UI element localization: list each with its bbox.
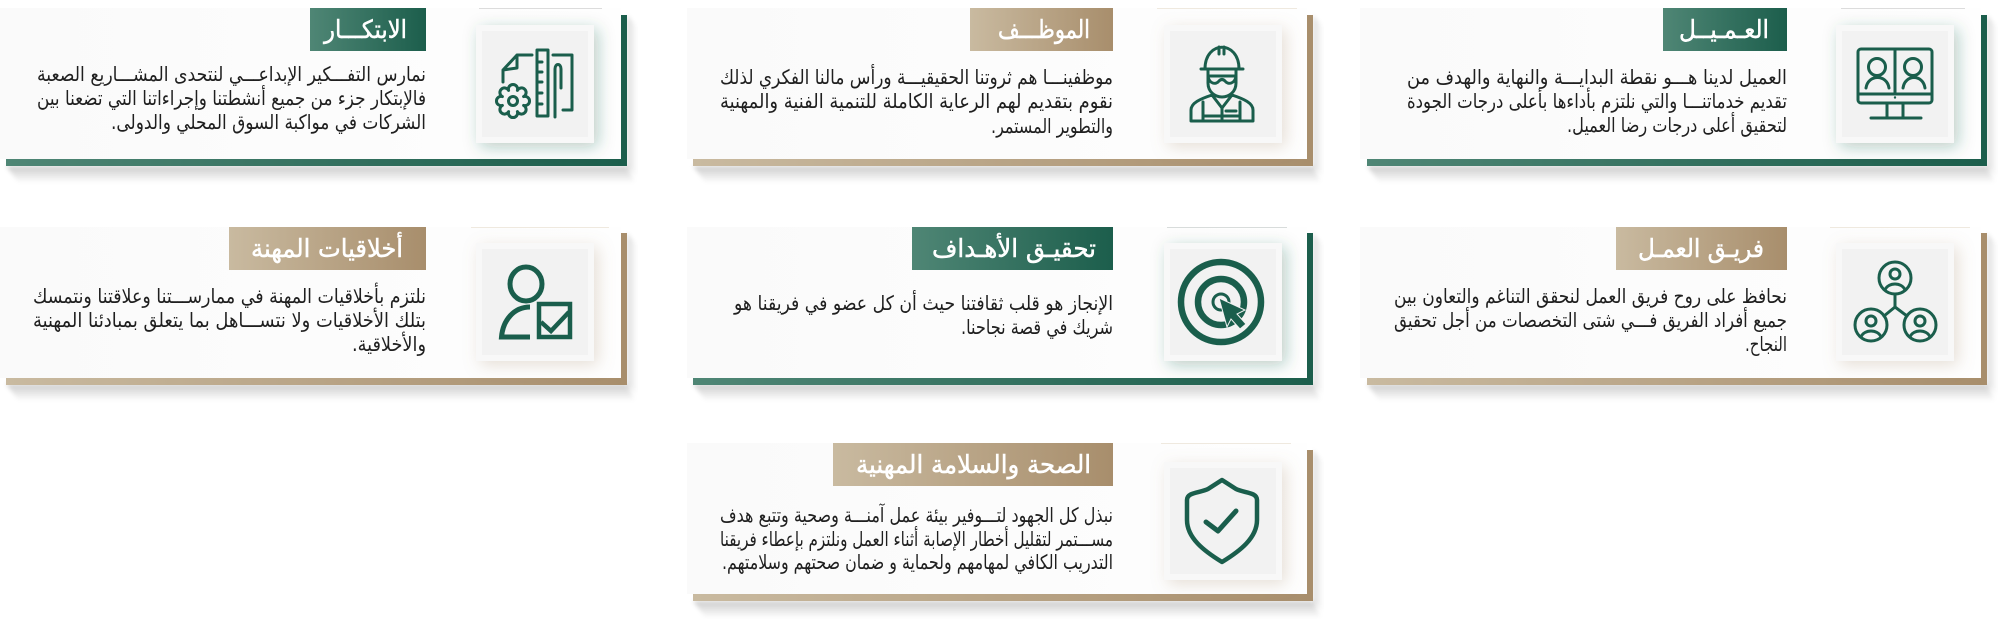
icon: team network	[1836, 243, 1954, 361]
text block: الموظف: والتطوير المستمر.	[991, 114, 1113, 138]
heading tab: العميل	[1663, 8, 1787, 51]
text block: الموظف: موظفينـــا هم ثروتنا الحقيقيـــة ورأس مالنا الفكري لذلك	[720, 64, 1113, 90]
heading tab: فريق العمل: فريـق العمـل	[1638, 234, 1764, 263]
text block: الموظف: نقوم بتقديم لهم الرعاية الكاملة للتنمية الفنية والمهنية	[720, 89, 1113, 113]
text block: العميل	[1407, 65, 1787, 137]
text block: تحقيق الأهداف	[733, 290, 1113, 340]
heading tab: الصحة والسلامة المهنية: الصحة والسلامة المهنية	[856, 450, 1091, 480]
text block: الابتكار: فالإبتكار جزء من جميع أنشطتنا وإجراءاتنا التي تضعنا بين	[37, 85, 426, 111]
heading tab: أخلاقيات المهنة: أخلاقيات المهنة	[251, 231, 403, 264]
text block: أخلاقيات المهنة: بتلك الأخلاقيات ولا نتســـاهل بما يتعلق بمبادئنا المهنية	[33, 308, 426, 332]
text block: الابتكار: الشركات في مواكبة السوق المحلي والدولى.	[111, 110, 426, 135]
icon: target with cursor	[1164, 243, 1282, 361]
icon: shield with check	[1164, 462, 1282, 580]
text block: الصحة والسلامة المهنية: التدريب الكافي لمهامهم ولحماية و ضمان صحتهم وسلامتهم.	[722, 550, 1113, 575]
text block: تحقيق الأهداف: الإنجاز هو قلب ثقافتنا حيث أن كل عضو في فريقنا هو	[733, 290, 1113, 316]
icon: video call monitor	[1836, 25, 1954, 143]
heading tab: الصحة والسلامة المهنية	[833, 443, 1113, 486]
panel: العميل	[1360, 8, 1997, 183]
heading tab: أخلاقيات المهنة	[229, 227, 426, 270]
heading tab: الموظف	[970, 8, 1113, 51]
panel: الموظف	[687, 8, 1323, 183]
panel: فريق العمل	[1360, 227, 1997, 401]
heading tab: تحقيق الأهداف: تحقيـق الأهـداف	[932, 232, 1096, 263]
heading tab: فريق العمل	[1616, 227, 1787, 270]
text block: الصحة والسلامة المهنية: مســـتمر لتقليل أخطار الإصابة أثناء العمل ونلتزم بإعطاء فريقنا	[720, 526, 1113, 552]
panel: أخلاقيات المهنة	[0, 227, 637, 401]
heading tab: الموظف: الموظـــف	[998, 15, 1090, 44]
text block: العميل: لتحقيق أعلى درجات رضا العميل.	[1567, 112, 1787, 137]
text block: العميل: تقديم خدماتنـــا والتي نلتزم بأداءها بأعلى درجات الجودة	[1407, 87, 1787, 114]
text block: فريق العمل: جميع أفراد الفريق فـــي شتى التخصصات من أجل تحقيق	[1394, 307, 1787, 333]
icon: worker with helmet	[1164, 25, 1282, 143]
text block: فريق العمل: نحافظ على روح فريق العمل لنحقق التناغم والتعاون بين	[1394, 284, 1787, 308]
icon: design tools and gear	[476, 25, 594, 143]
icon: person with check box	[476, 243, 594, 361]
text block: الابتكار	[37, 62, 426, 135]
text block: الابتكار: نمارس التفـــكير الإبداعـــي لنتحدى المشـــاريع الصعبة	[37, 62, 426, 87]
heading tab: تحقيق الأهداف	[912, 227, 1113, 270]
text block: الصحة والسلامة المهنية: نبذل كل الجهود لتـــوفير بيئة عمل آمنـــة وصحية وتتبع هدف	[720, 502, 1113, 527]
text block: الموظف	[720, 64, 1113, 138]
text block: أخلاقيات المهنة	[33, 282, 426, 356]
heading tab: الابتكار	[310, 8, 426, 51]
text block: الصحة والسلامة المهنية	[720, 502, 1113, 575]
text block: فريق العمل: النجاح.	[1745, 332, 1787, 356]
heading tab: الابتكار: الابتكـــار	[322, 15, 407, 44]
text block: فريق العمل	[1394, 284, 1787, 356]
text block: العميل: العميل لدينا هـــو نقطة البدايـــة والنهاية والهدف من	[1407, 65, 1787, 89]
text block: أخلاقيات المهنة: نلتزم بأخلاقيات المهنة في ممارســـتنا وعلاقتنا ونتمسك	[33, 282, 426, 309]
text block: أخلاقيات المهنة: والأخلاقية.	[352, 332, 426, 356]
panel: تحقيق الأهداف	[687, 227, 1323, 401]
panel: الابتكار	[0, 8, 637, 183]
text block: تحقيق الأهداف: شريك في قصة نجاحنا.	[961, 315, 1113, 340]
heading tab: العميل: العـمـيــل	[1679, 15, 1769, 44]
panel: الصحة والسلامة المهنية	[687, 443, 1323, 618]
